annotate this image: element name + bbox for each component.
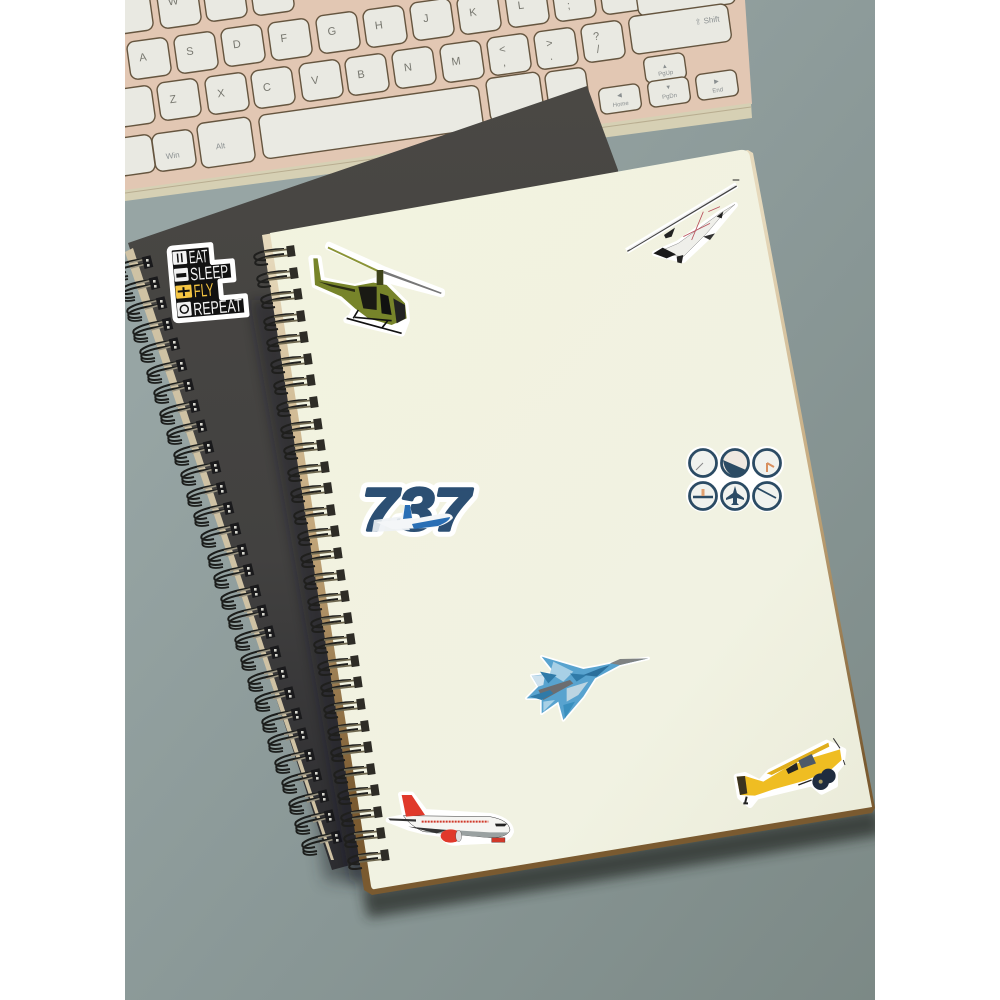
- sticker: 737 logo: 737: [362, 476, 473, 543]
- keyboard: ▼: [665, 85, 672, 91]
- keyboard: PgUp: [658, 70, 674, 78]
- keyboard: V: [311, 74, 320, 87]
- sticker: eat sleep fly repeat: REPEAT: [192, 295, 243, 319]
- keyboard: C: [262, 81, 272, 94]
- back notebook cover: [128, 86, 640, 870]
- keyboard: ◀: [617, 93, 623, 99]
- keyboard: X: [217, 87, 226, 100]
- keyboard: >: [545, 37, 553, 50]
- keyboard: ,: [502, 57, 507, 69]
- sticker: flight instruments: [686, 446, 784, 512]
- keyboard: ⇧ Shift: [694, 14, 721, 27]
- keyboard: N: [403, 61, 413, 74]
- keyboard: End: [712, 87, 724, 95]
- keyboard: ;: [566, 0, 571, 12]
- keyboard: /: [596, 43, 601, 56]
- keyboard: [108, 0, 752, 201]
- keyboard: K: [468, 6, 478, 19]
- keyboard: .: [549, 51, 554, 63]
- sticker: yellow bush plane: [737, 738, 845, 805]
- front notebook page: [270, 150, 872, 889]
- keyboard: J: [422, 13, 429, 25]
- sticker: eat sleep fly repeat: [169, 242, 247, 321]
- white margin left: [0, 0, 125, 1000]
- keyboard: A: [138, 51, 148, 64]
- instrument: vertical speed: [754, 482, 780, 510]
- back notebook spiral rings: [113, 255, 342, 855]
- keyboard: G: [327, 25, 337, 38]
- back notebook page edge: [125, 248, 334, 860]
- sticker: blue camo fighter jet: [527, 657, 648, 720]
- front notebook spiral rings: [254, 245, 390, 869]
- keyboard: Alt: [215, 141, 227, 151]
- keyboard: F: [280, 32, 288, 45]
- sticker: red tail airliner: [388, 794, 511, 843]
- icon: small blue airliner: [376, 505, 453, 529]
- instrument: attitude: [722, 450, 748, 476]
- front notebook brown edge: [262, 150, 875, 895]
- keyboard: Win: [165, 150, 180, 161]
- sticker: helicopter: [312, 245, 442, 333]
- keyboard: ▶: [714, 79, 720, 85]
- instrument: turn coordinator: [690, 482, 716, 510]
- keyboard: S: [185, 45, 194, 58]
- keyboard: ▲: [661, 64, 668, 70]
- sticker: eat sleep fly repeat: SLEEP: [189, 261, 229, 284]
- keyboard: PgDn: [662, 93, 678, 101]
- keyboard: Z: [169, 93, 177, 106]
- keyboard: ?: [592, 31, 600, 43]
- shadow of back notebook: [300, 700, 380, 885]
- instrument: airspeed: [690, 450, 716, 476]
- keyboard: H: [374, 19, 384, 32]
- keyboard: M: [451, 55, 461, 68]
- instrument: heading: [722, 482, 748, 510]
- sticker: 737 logo: 737: [362, 476, 473, 543]
- sticker: cessna plane: [627, 180, 739, 263]
- sticker: eat sleep fly repeat: EAT: [188, 246, 209, 268]
- keyboard: D: [232, 38, 242, 51]
- keyboard: B: [357, 68, 366, 81]
- sticker: eat sleep fly repeat: FLY: [193, 280, 215, 301]
- white margin right: [875, 0, 1000, 1000]
- shadow of front notebook: [250, 300, 882, 918]
- keyboard: <: [498, 43, 506, 56]
- instrument: altimeter: [754, 450, 780, 476]
- keyboard: Home: [612, 101, 630, 109]
